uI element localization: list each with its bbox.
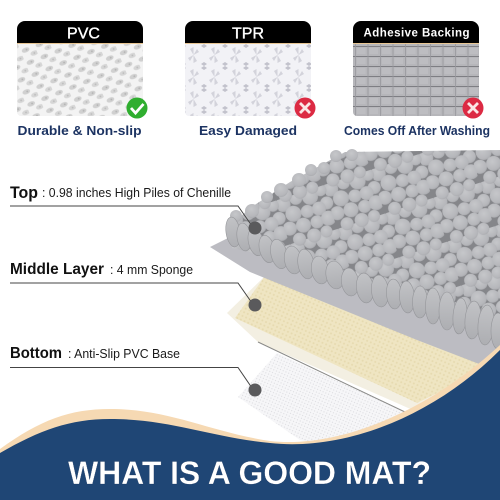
label: middle layer: : 4 mm Sponge: [110, 263, 193, 277]
TPR caption: Easy Damaged: [199, 123, 297, 138]
edge piles: [230, 149, 358, 222]
icon: red cross: [294, 98, 316, 118]
top layer: chenille base strip: [210, 232, 500, 372]
banner title: WHAT IS A GOOD MAT?: [68, 455, 431, 491]
label: bottom layer: [10, 345, 262, 396]
TPR header: [185, 21, 311, 43]
mat layers illustration: [210, 149, 500, 450]
card: Adhesive Backing: Adhesive Backing: [364, 28, 470, 40]
PVC texture: [17, 44, 143, 116]
bottom layer: PVC base: [238, 353, 405, 450]
PVC caption: Durable & Non-slip: [18, 123, 142, 138]
label: top layer: Top: [10, 184, 38, 202]
Adhesive caption: Comes Off After Washing: [344, 124, 490, 138]
TPR texture: [185, 44, 311, 116]
icon: green check: [126, 98, 148, 118]
card: PVC: [17, 21, 148, 138]
Adhesive texture: [353, 44, 479, 116]
icon: red cross: [462, 98, 484, 118]
banner wave: [0, 345, 500, 500]
label: top layer: [10, 184, 262, 234]
label: bottom layer: Bottom: [10, 345, 62, 362]
top layer: chenille piles: [224, 149, 500, 349]
label: middle layer: Middle Layer: [10, 261, 104, 278]
PVC header: [17, 21, 143, 43]
card: Adhesive Backing: [344, 21, 490, 138]
middle layer: sponge: [227, 276, 500, 412]
label: top layer: : 0.98 inches High Piles of Chenille: [42, 186, 231, 200]
card: PVC: PVC: [67, 26, 100, 42]
front fringe: [224, 216, 500, 349]
label: middle layer: [10, 261, 262, 312]
card: TPR: TPR: [232, 26, 264, 42]
label: bottom layer: : Anti-Slip PVC Base: [68, 347, 180, 361]
card: TPR: [185, 21, 316, 138]
Adhesive header: [353, 21, 479, 43]
